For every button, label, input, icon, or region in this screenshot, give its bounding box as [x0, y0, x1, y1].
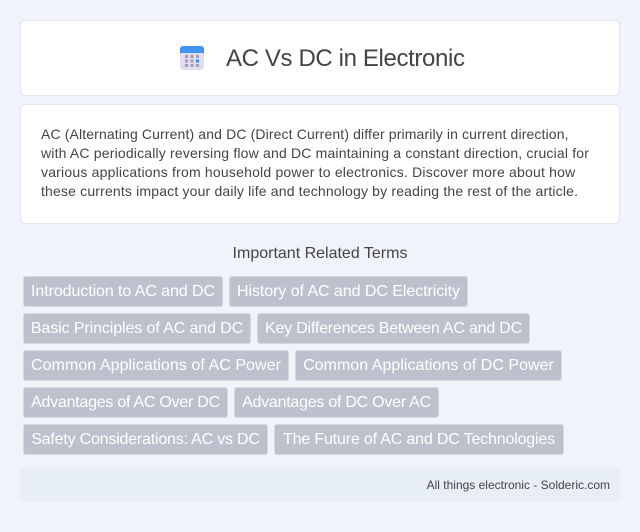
tag: Advantages of AC Over DC	[31, 394, 220, 411]
intro paragraph	[41, 126, 589, 199]
tag: Key Differences Between AC and DC	[265, 320, 522, 337]
tag: History of AC and DC Electricity	[237, 283, 460, 300]
intro paragraph: AC (Alternating Current) and DC (Direct Current) differ primarily in current direction,	[41, 126, 569, 142]
tag	[23, 350, 289, 381]
tag	[274, 424, 564, 455]
related terms heading: Important Related Terms	[233, 245, 407, 262]
tag: Advantages of DC Over AC	[242, 394, 431, 411]
intro paragraph: with AC periodically reversing flow and DC maintaining a constant direction, crucial for	[41, 145, 589, 161]
related term tags	[23, 276, 564, 455]
tag	[23, 387, 228, 418]
tag	[23, 276, 223, 307]
tag	[257, 313, 530, 344]
tag	[234, 387, 439, 418]
tag: Common Applications of DC Power	[303, 357, 554, 374]
tag: Common Applications of AC Power	[31, 357, 281, 374]
footer text: All things electronic - Solderic.com	[427, 478, 610, 492]
title: AC Vs DC in Electronic	[226, 45, 465, 72]
intro paragraph: various applications from household power to electronics. Discover more about how	[41, 164, 575, 180]
title card	[20, 20, 620, 96]
intro text panel	[20, 104, 620, 224]
tag	[23, 424, 268, 455]
footer	[20, 468, 620, 502]
tag	[23, 313, 251, 344]
tag	[229, 276, 468, 307]
tag: Introduction to AC and DC	[31, 283, 215, 300]
icon: calendar	[180, 46, 204, 70]
tag	[295, 350, 562, 381]
tag: The Future of AC and DC Technologies	[283, 431, 555, 448]
tag: Basic Principles of AC and DC	[31, 320, 243, 337]
tag: Safety Considerations: AC vs DC	[31, 431, 260, 448]
intro paragraph: these currents impact your daily life and technology by reading the rest of the article.	[41, 183, 578, 199]
